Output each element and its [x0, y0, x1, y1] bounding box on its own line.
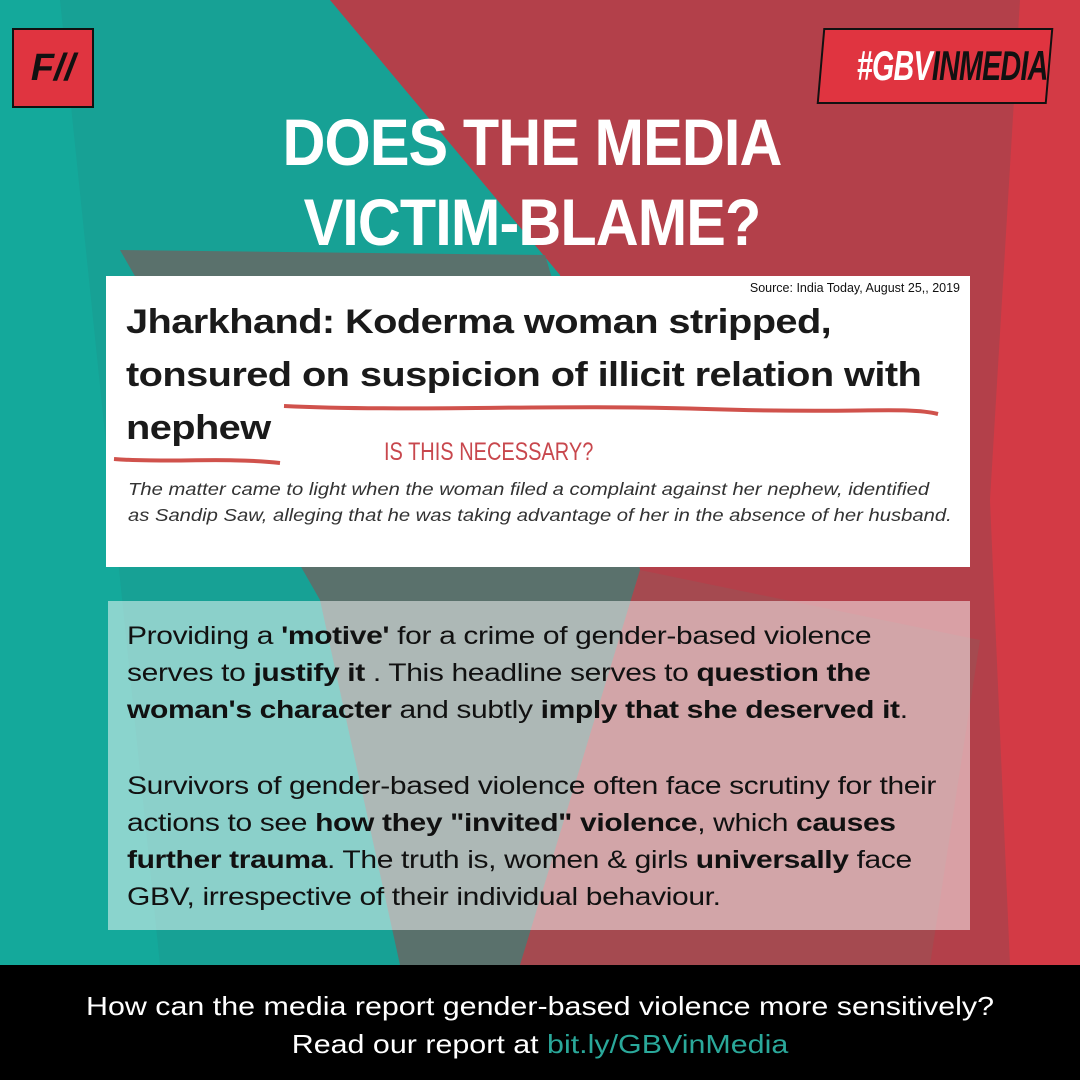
logo: F//: F//: [31, 46, 75, 88]
title: DOES THE MEDIA: [283, 105, 781, 179]
footer text: [86, 991, 994, 1059]
logo: F//: [12, 28, 94, 108]
tag: #GBVINMEDIA: #GBVINMEDIA: [857, 42, 1048, 89]
paragraph 1: woman's character and subtly imply that she deserved it.: [127, 696, 908, 724]
title: [283, 105, 781, 259]
source line: Source: India Today, August 25,, 2019: [750, 281, 960, 295]
paragraph 2: Survivors of gender-based violence often face scrutiny for their: [127, 772, 936, 800]
headline: tonsured on suspicion of illicit relation with: [126, 356, 921, 394]
article excerpt: [128, 479, 952, 525]
tag: #GBVINMEDIA: [816, 28, 1054, 104]
paragraph 1: Providing a 'motive' for a crime of gender-based violence: [127, 622, 871, 650]
news clipping card: [106, 276, 970, 567]
paragraph 2: [127, 772, 936, 911]
explanation text box: [108, 601, 970, 930]
red underlines: [114, 404, 938, 465]
footer text: How can the media report gender-based violence more sensitively?: [86, 991, 994, 1021]
headline: [126, 303, 921, 447]
title: VICTIM-BLAME?: [304, 185, 760, 259]
headline: Jharkhand: Koderma woman stripped,: [126, 303, 831, 341]
footer text: Read our report at bit.ly/GBVinMedia: [292, 1029, 788, 1059]
paragraph 2: actions to see how they "invited" violence, which causes: [127, 809, 896, 837]
paragraph 2: GBV, irrespective of their individual behaviour.: [127, 883, 721, 911]
footer: [0, 965, 1080, 1080]
article excerpt: The matter came to light when the woman filed a complaint against her nephew, identified: [128, 479, 929, 499]
headline: nephew: [126, 409, 271, 447]
paragraph 1: serves to justify it . This headline serves to question the: [127, 659, 870, 687]
callout: is this necessary: IS THIS NECESSARY?: [384, 438, 593, 466]
paragraph 1: [126, 622, 908, 724]
article excerpt: as Sandip Saw, alleging that he was taking advantage of her in the absence of her husband.: [128, 505, 952, 525]
paragraph 2: further trauma. The truth is, women & girls universally face: [127, 846, 912, 874]
